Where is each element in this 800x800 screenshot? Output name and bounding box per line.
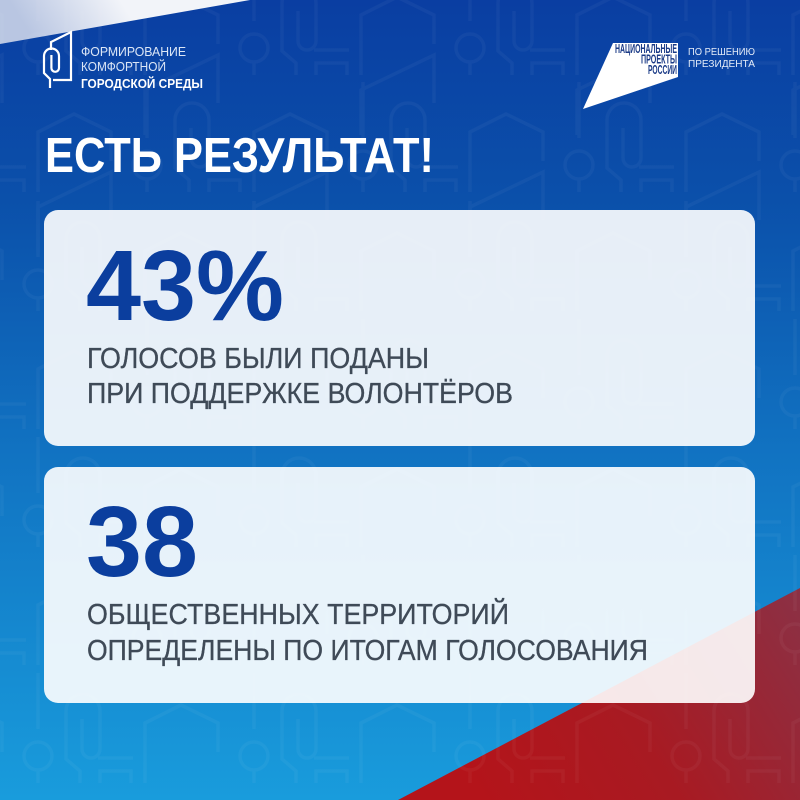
- logo: national projects: [583, 42, 755, 109]
- logo text: [81, 45, 203, 91]
- white flag shape: [583, 43, 678, 109]
- description: ОПРЕДЕЛЕНЫ ПО ИТОГАМ ГОЛОСОВАНИЯ: [87, 635, 648, 667]
- logo text: КОМФОРТНОЙ: [81, 59, 166, 74]
- logo text: ГОРОДСКОЙ СРЕДЫ: [81, 76, 203, 91]
- card background: [44, 467, 755, 703]
- flag text: РОССИИ: [648, 63, 677, 77]
- flag text: [615, 42, 677, 77]
- big number: 43%: [86, 230, 284, 342]
- white corner triangle: [0, 0, 250, 44]
- big number: 38: [86, 486, 198, 598]
- description: ГОЛОСОВ БЫЛИ ПОДАНЫ: [87, 343, 429, 375]
- icon: building and paperclip: [44, 32, 71, 88]
- logo text: ФОРМИРОВАНИЕ: [81, 45, 186, 59]
- by decision of the president: [688, 47, 755, 70]
- description: ОБЩЕСТВЕННЫХ ТЕРРИТОРИЙ: [87, 599, 509, 631]
- by decision of the president: ПО РЕШЕНИЮ: [688, 47, 755, 58]
- title: ЕСТЬ РЕЗУЛЬТАТ!: [45, 129, 434, 183]
- flag text: НАЦИОНАЛЬНЫЕ: [615, 42, 677, 56]
- card background: [44, 210, 755, 446]
- logo: comfortable urban environment: [44, 32, 203, 91]
- description: ПРИ ПОДДЕРЖКЕ ВОЛОНТЁРОВ: [87, 378, 513, 410]
- flag text: ПРОЕКТЫ: [641, 52, 677, 66]
- red corner triangle: [398, 588, 800, 800]
- description: [87, 599, 648, 667]
- description: [87, 343, 513, 410]
- panel: 38 territories: [44, 467, 755, 703]
- by decision of the president: ПРЕЗИДЕНТА: [688, 59, 755, 70]
- panel: 43 percent: [44, 210, 755, 446]
